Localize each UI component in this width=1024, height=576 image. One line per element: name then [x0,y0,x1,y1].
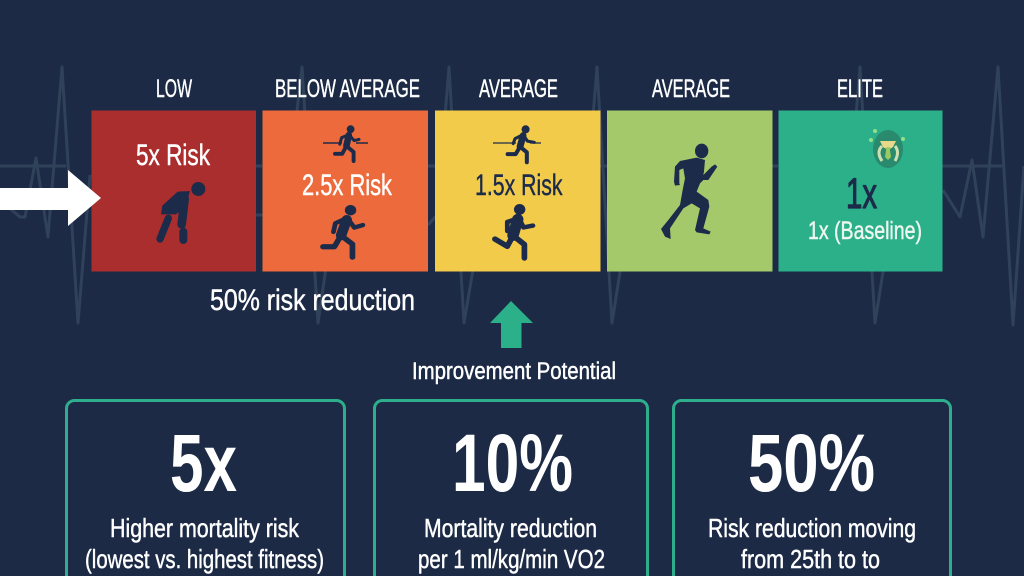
icon: runner [323,205,363,257]
text: 5x risk: 5x Risk [136,139,211,172]
panel: average yellow [435,110,600,272]
text: 50% risk reduction: 50% risk reduction [210,284,415,317]
panel: low fitness [92,110,256,272]
panel: stat 50% [674,400,950,576]
icon: small runner with speed line [493,125,541,162]
stat: 5x: 5x [170,418,237,509]
icon: small runner with speed line [323,125,368,161]
panel: elite [778,110,942,272]
text: risk reduction description: from 25th to to [741,544,880,574]
icon: elite emblem [869,129,905,168]
heading: AVERAGE: AVERAGE [479,75,558,103]
text: risk reduction description: Risk reduction moving [708,513,916,543]
text: 1x: 1x [846,170,877,218]
text: higher mortality risk description [85,513,324,574]
stat: 50%: 50% [748,418,875,509]
panel: stat 10% [374,400,648,576]
text: higher mortality risk description: Higher mortality risk [110,513,300,543]
text: improvement potential: Improvement Potential [412,358,616,385]
text: 1x baseline: 1x (Baseline) [808,217,922,245]
heading: AVERAGE second: AVERAGE [652,75,730,103]
arrow: white pointer into scale [0,170,101,226]
heading: LOW: LOW [156,75,192,103]
stat: 10%: 10% [452,418,573,509]
text: higher mortality risk description: (lowest vs. highest fitness) [85,544,324,574]
arrow: improvement up arrow [490,301,533,348]
text: 1.5x risk: 1.5x Risk [475,169,563,202]
icon: runner [495,204,533,258]
panel: stat 5x [66,400,344,576]
heading: BELOW AVERAGE: BELOW AVERAGE [275,75,420,103]
background: ECG heartbeat line [0,67,1024,325]
text: mortality reduction description: Mortality reduction [424,513,597,543]
text: mortality reduction description [418,513,605,574]
text: mortality reduction description: per 1 ml/kg/min VO2 [418,544,605,574]
text: 2.5x risk: 2.5x Risk [302,169,393,202]
panel: average green [607,110,772,272]
text: risk reduction description [708,513,916,574]
panel: below average [262,110,428,272]
icon: exhausted person bent over [160,182,205,240]
heading: ELITE: ELITE [837,75,883,103]
icon: large runner silhouette [661,144,717,239]
